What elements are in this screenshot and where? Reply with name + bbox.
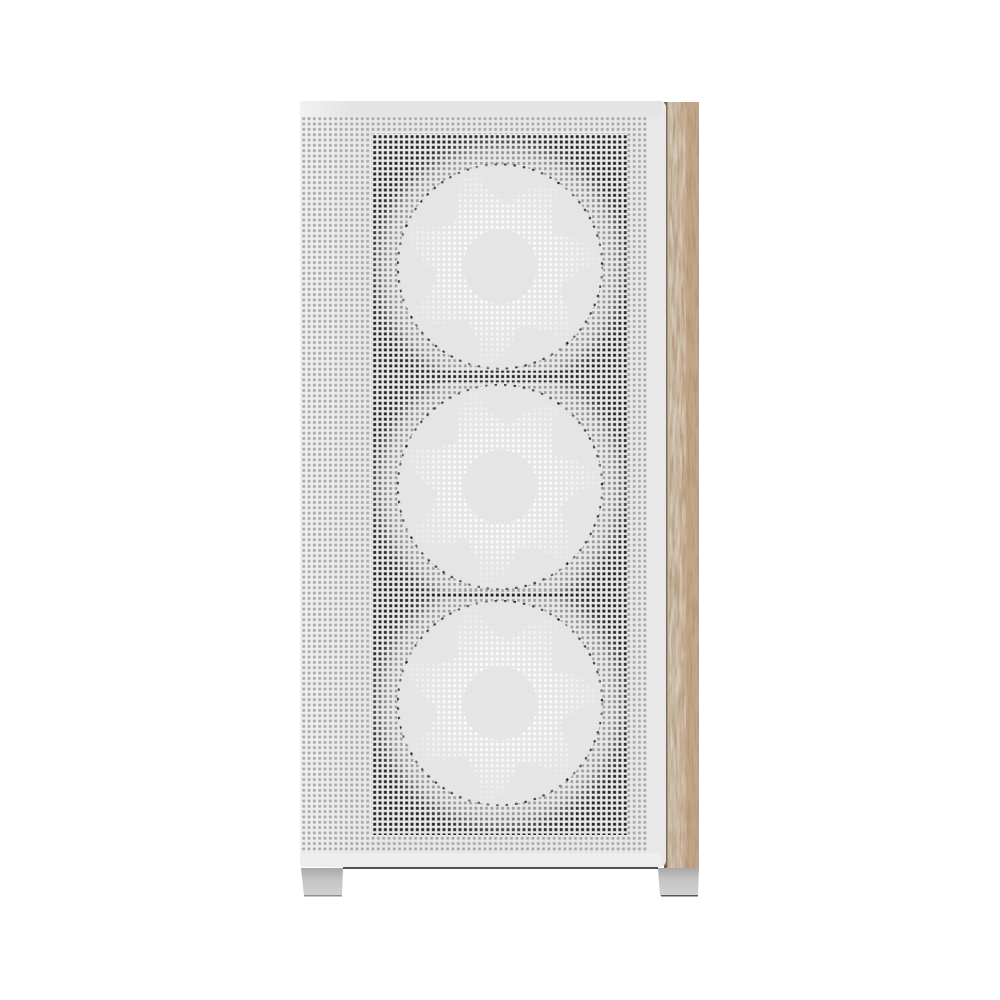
PC case front view: [300, 101, 699, 896]
bottom shadow gap: [343, 867, 658, 869]
top edge band: [300, 101, 662, 116]
bottom edge band: [300, 853, 662, 866]
fan 3: [396, 600, 604, 806]
fan 1: [396, 164, 604, 370]
front panel: [300, 101, 666, 867]
left foot: [301, 868, 343, 896]
fan 2: [396, 384, 604, 590]
wood side panel: [664, 102, 699, 868]
outer mesh: [301, 116, 647, 853]
inner mesh: [372, 134, 627, 835]
right foot: [658, 868, 699, 896]
